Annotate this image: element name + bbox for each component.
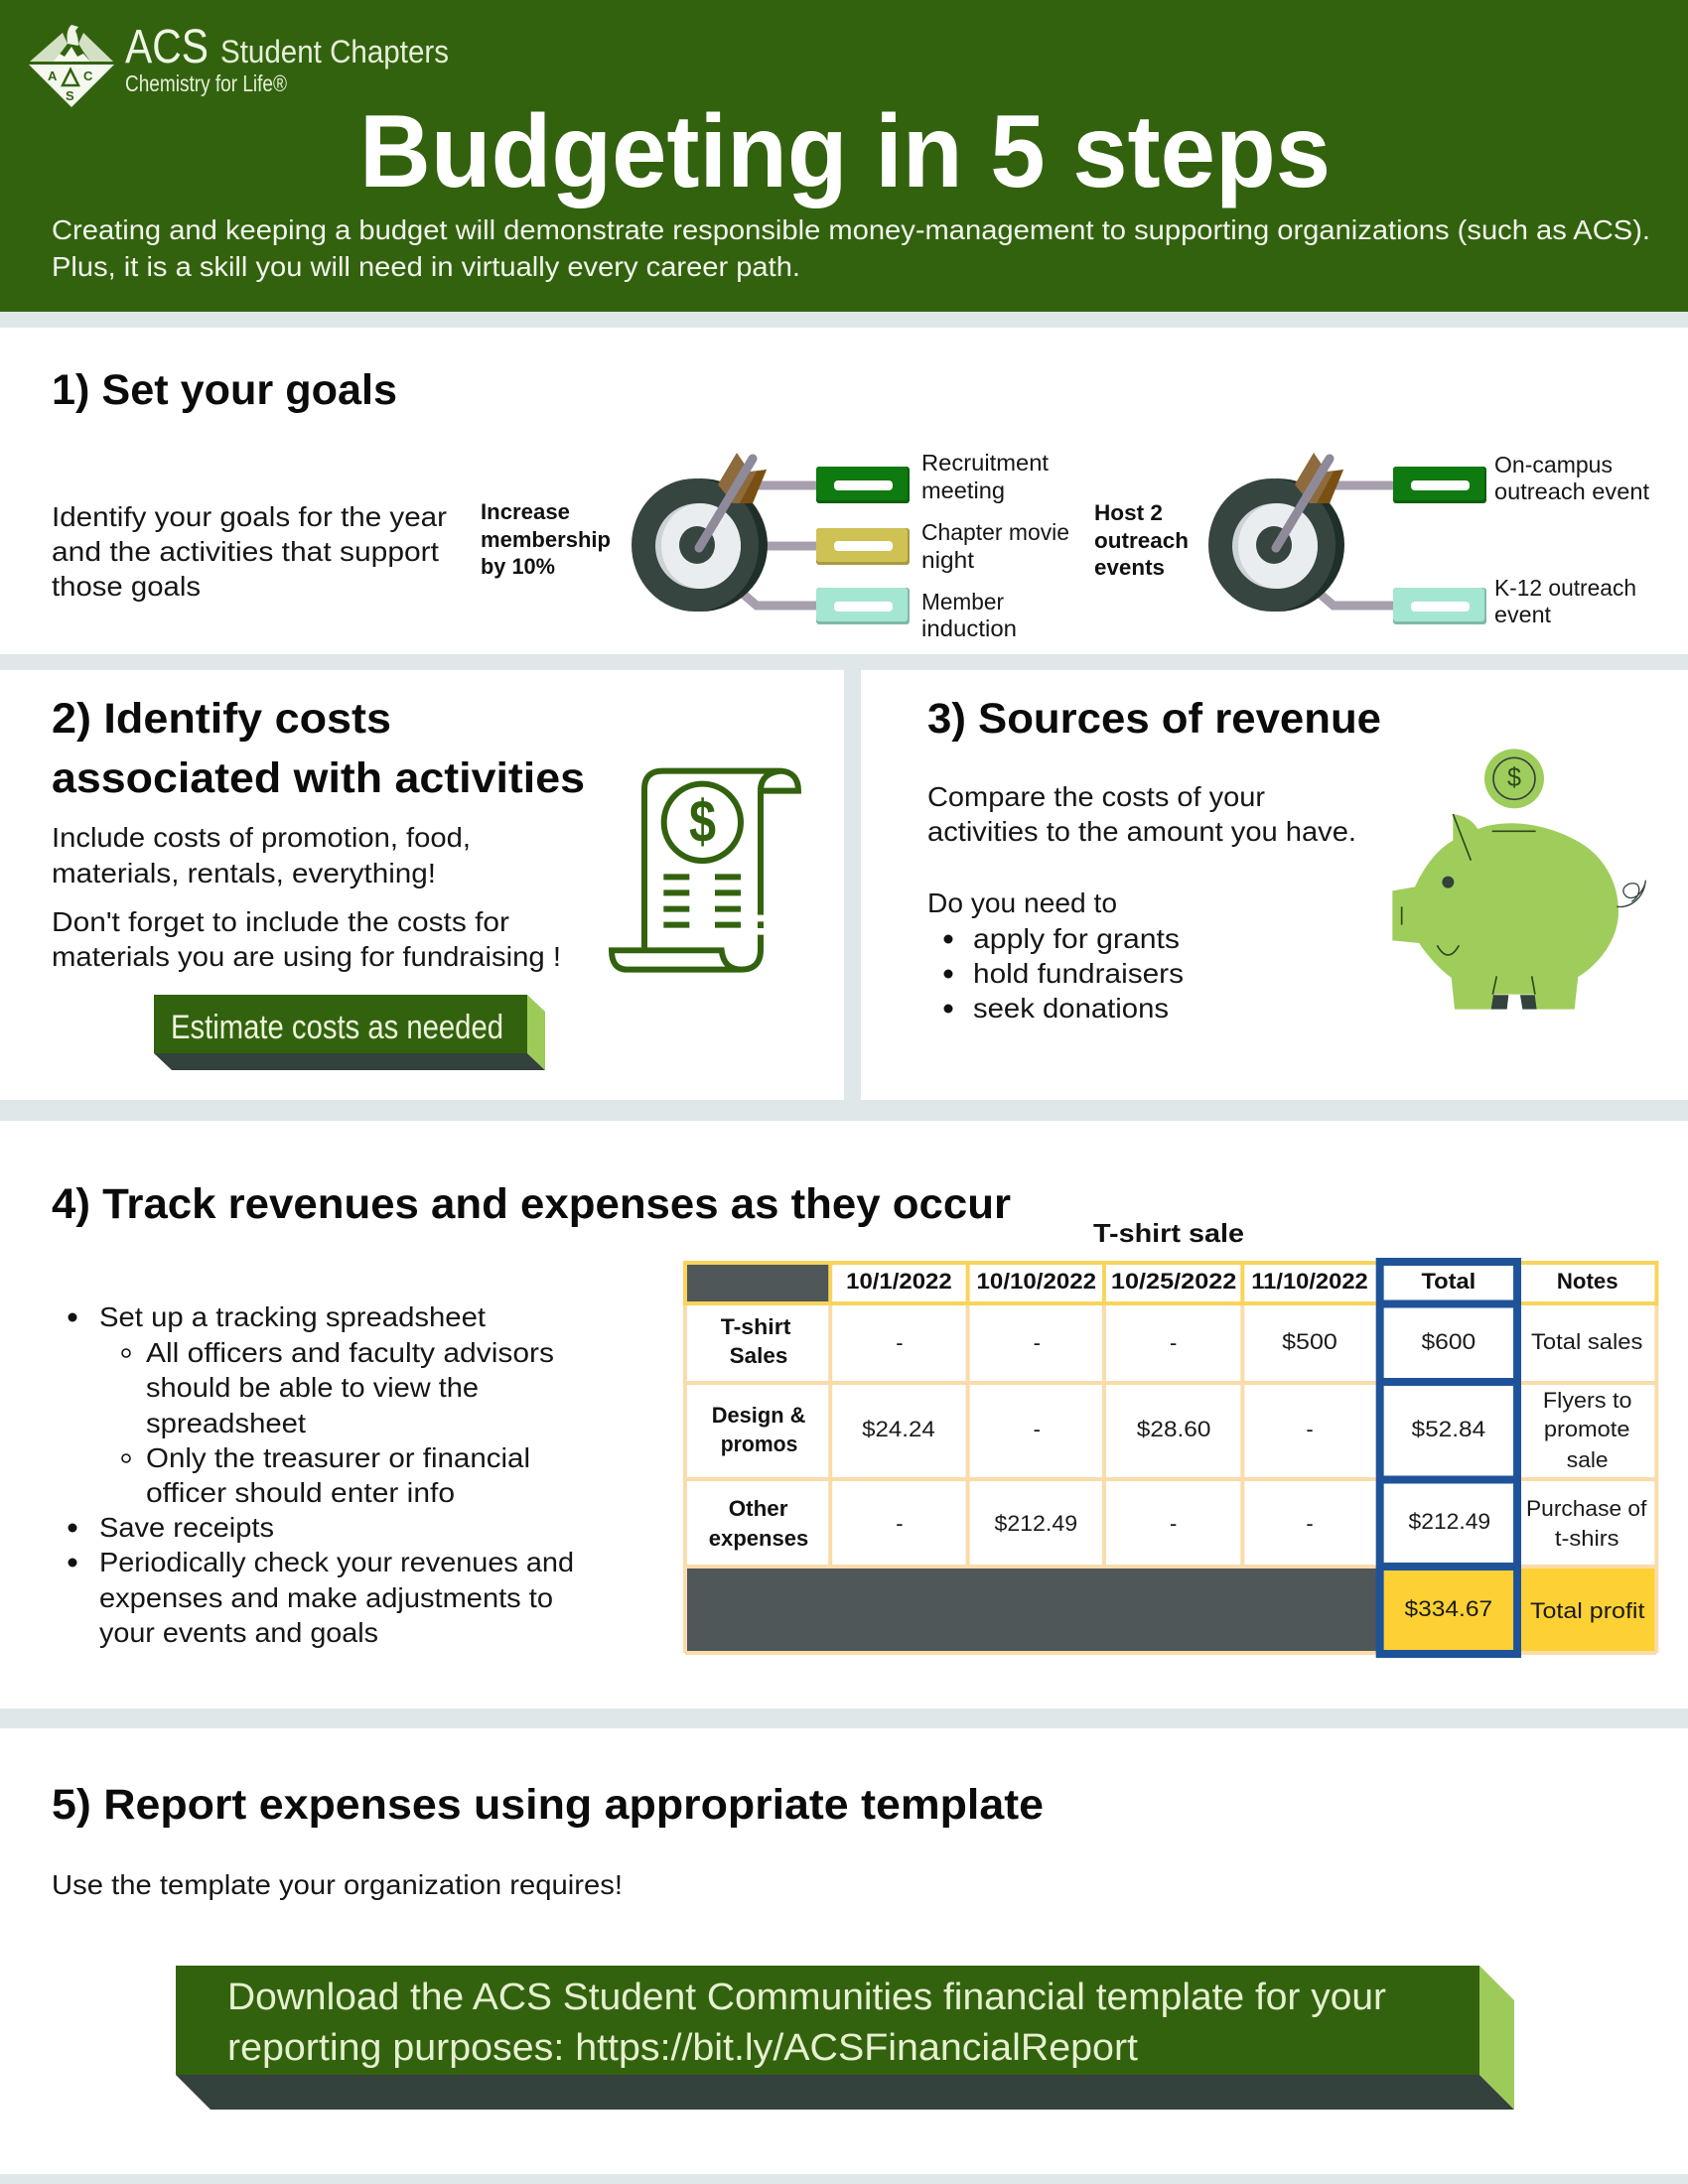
row: design and promos: promos (721, 1432, 797, 1456)
activity labels: membership: Recruitment (921, 450, 1050, 476)
step 4 bullet list: expenses and make adjustments to (99, 1582, 553, 1613)
logo: ACS Student Chapters (29, 21, 449, 107)
step 2 body text (52, 822, 561, 972)
heading: step 3: 3) Sources of revenue (927, 695, 1381, 743)
goal label: increase membership: membership (481, 527, 611, 552)
row: t-shirt sales (721, 1314, 1642, 1368)
icon: receipt scroll with dollar sign: $ (689, 788, 716, 855)
header row: Notes (1557, 1269, 1618, 1294)
row: t-shirt sales: $500 (1282, 1329, 1337, 1354)
step 3 body text: Do you need to (927, 887, 1117, 918)
activity labels: membership: meeting (921, 478, 1005, 503)
yellow profit cells (1379, 1567, 1656, 1654)
icon: receipt scroll with dollar sign (612, 771, 798, 970)
step 1 body text (52, 501, 447, 602)
icon: piggy bank with coin (1392, 749, 1645, 1010)
row: design and promos: - (1034, 1417, 1041, 1441)
step 1 body text: those goals (52, 571, 201, 602)
step 4 bullet list: All officers and faculty advisors (146, 1337, 554, 1368)
step 3 body text: seek donations (973, 993, 1169, 1024)
activity labels: membership: night (921, 547, 975, 573)
row: other expenses: $212.49 (994, 1511, 1077, 1536)
heading: step 2: associated with activities (52, 754, 585, 802)
step 1 body text: and the activities that support (52, 536, 439, 567)
activity labels: outreach: event (1494, 602, 1552, 627)
panel: header (0, 0, 1688, 312)
step 1 body text: Identify your goals for the year (52, 501, 447, 532)
highlighted total column (1380, 1262, 1517, 1654)
header row: 11/10/2022 (1251, 1269, 1368, 1294)
goal label: host 2 outreach events: events (1094, 555, 1165, 580)
header row (846, 1269, 1618, 1294)
row: t-shirt sales: $600 (1421, 1329, 1476, 1354)
row: other expenses: t-shirs (1555, 1526, 1619, 1551)
callout: download template (176, 1966, 1514, 2110)
table: t-shirt sale budget (685, 1261, 1656, 1654)
row: t-shirt sales: T-shirt (721, 1314, 791, 1339)
step 4 bullet list: should be able to view the (146, 1372, 479, 1403)
row: design and promos: sale (1567, 1447, 1609, 1472)
heading: step 1: 1) Set your goals (52, 366, 397, 414)
activity labels: outreach: outreach event (1494, 478, 1650, 504)
title: Budgeting in 5 steps (359, 94, 1331, 209)
goal label: increase membership: by 10% (481, 554, 555, 579)
step 4 bullet list: Set up a tracking spreadsheet (99, 1301, 486, 1332)
step 3 body text (927, 781, 1356, 1024)
step 2 body text: materials, rentals, everything! (52, 858, 436, 888)
activity labels: membership: induction (921, 615, 1017, 641)
row: design and promos (712, 1388, 1631, 1472)
dark table cells (687, 1263, 1377, 1653)
heading: step 4: 4) Track revenues and expenses as they occur (52, 1180, 1011, 1228)
row: t-shirt sales: - (1170, 1330, 1177, 1355)
logo: ACS Student Chapters: Student Chapters (220, 34, 449, 69)
header row: 10/1/2022 (846, 1269, 952, 1294)
step 3 body text: hold fundraisers (973, 958, 1184, 989)
step 4 bullet list: spreadsheet (146, 1408, 306, 1438)
row: other expenses: $212.49 (1409, 1509, 1490, 1534)
header row: Total (1421, 1269, 1476, 1294)
logo: ACS Student Chapters: ACS (125, 21, 209, 73)
callout: estimate costs: Estimate costs as needed (171, 1009, 503, 1046)
row: design and promos: - (1306, 1417, 1314, 1441)
step 4 bullet list: Only the treasurer or financial (146, 1442, 530, 1473)
step 4 bullet list: officer should enter info (146, 1477, 455, 1508)
logo: ACS Student Chapters: S (66, 88, 74, 103)
activity labels: outreach (1494, 452, 1650, 627)
activity labels: outreach: K-12 outreach (1494, 575, 1636, 601)
header row: 10/25/2022 (1111, 1269, 1236, 1294)
intro text: Creating and keeping a budget will demonstrate responsible money-management to supporting organizations (such as ACS). (52, 214, 1650, 245)
intro text (52, 214, 1650, 282)
step 2 body text: Don't forget to include the costs for (52, 906, 509, 937)
callout: download template: reporting purposes: https://bit.ly/ACSFinancialReport (227, 2027, 1138, 2069)
row: t-shirt sales: - (896, 1330, 904, 1355)
row: design and promos: $24.24 (862, 1417, 935, 1441)
row: other expenses: Purchase of (1526, 1496, 1647, 1521)
row: design and promos: $52.84 (1412, 1417, 1485, 1441)
row: design and promos: promote (1544, 1417, 1630, 1441)
goal label: host 2 outreach events (1094, 500, 1189, 580)
row: design and promos: Flyers to (1543, 1388, 1631, 1413)
heading: step 2 (52, 695, 585, 802)
table title: T-shirt sale (1093, 1218, 1244, 1248)
goal label: increase membership (481, 499, 611, 579)
panel: step 3 sources of revenue (861, 670, 1688, 1100)
icon: target with two activities (1208, 453, 1486, 624)
row: other expenses: - (1306, 1511, 1314, 1536)
row: t-shirt sales: Sales (730, 1343, 787, 1368)
panel: step 4 track revenues and expenses (0, 1121, 1688, 1708)
heading: step 5: 5) Report expenses using appropriate template (52, 1781, 1044, 1829)
step 3 body text: Compare the costs of your (927, 781, 1265, 812)
callout: estimate costs (154, 995, 545, 1070)
goal label: host 2 outreach events: outreach (1094, 528, 1189, 553)
row: other expenses (709, 1496, 1647, 1551)
logo: ACS Student Chapters: Chemistry for Life® (125, 70, 287, 96)
header row: 10/10/2022 (977, 1269, 1096, 1294)
row: design and promos: $28.60 (1137, 1417, 1210, 1441)
logo: ACS Student Chapters: A (48, 68, 58, 83)
row: t-shirt sales: - (1034, 1330, 1041, 1355)
activity labels: outreach: On-campus (1494, 452, 1613, 478)
step 2 body text: Include costs of promotion, food, (52, 822, 471, 853)
activity labels: membership (921, 450, 1069, 641)
panel: step 5 report expenses (0, 1728, 1688, 2174)
step 4 bullet list: Save receipts (99, 1512, 274, 1543)
row: total profit (1405, 1596, 1644, 1623)
step 3 body text: apply for grants (973, 923, 1180, 954)
icon: target with three activities (632, 453, 910, 624)
step 4 bullet list (68, 1301, 574, 1648)
icon: piggy bank with coin: $ (1507, 762, 1521, 792)
logo: ACS Student Chapters: C (83, 68, 93, 83)
row: other expenses: - (896, 1511, 904, 1536)
row: total profit: Total profit (1530, 1598, 1644, 1623)
intro text: Plus, it is a skill you will need in virtually every career path. (52, 251, 800, 282)
row: total profit: $334.67 (1405, 1596, 1492, 1621)
activity labels: membership: Member (921, 589, 1004, 614)
panel: step 1 set your goals (0, 328, 1688, 654)
row: design and promos: Design & (712, 1403, 806, 1428)
goal label: increase membership: Increase (481, 499, 570, 524)
step 4 bullet list: Periodically check your revenues and (99, 1547, 574, 1577)
row: other expenses: Other (729, 1496, 788, 1521)
activity labels: membership: Chapter movie (921, 519, 1069, 545)
step 3 body text: activities to the amount you have. (927, 816, 1356, 847)
row: other expenses: - (1170, 1511, 1177, 1536)
step 4 bullet list: your events and goals (99, 1617, 378, 1648)
step 2 body text: materials you are using for fundraising ! (52, 941, 561, 972)
row: other expenses: expenses (709, 1526, 808, 1551)
step 5 body text: Use the template your organization requires! (52, 1869, 623, 1900)
heading: step 2: 2) Identify costs (52, 695, 391, 743)
panel: step 2 identify costs (0, 670, 844, 1100)
goal label: host 2 outreach events: Host 2 (1094, 500, 1163, 525)
row: t-shirt sales: Total sales (1531, 1329, 1642, 1354)
callout: download template: Download the ACS Student Communities financial template for your (227, 1977, 1386, 2018)
